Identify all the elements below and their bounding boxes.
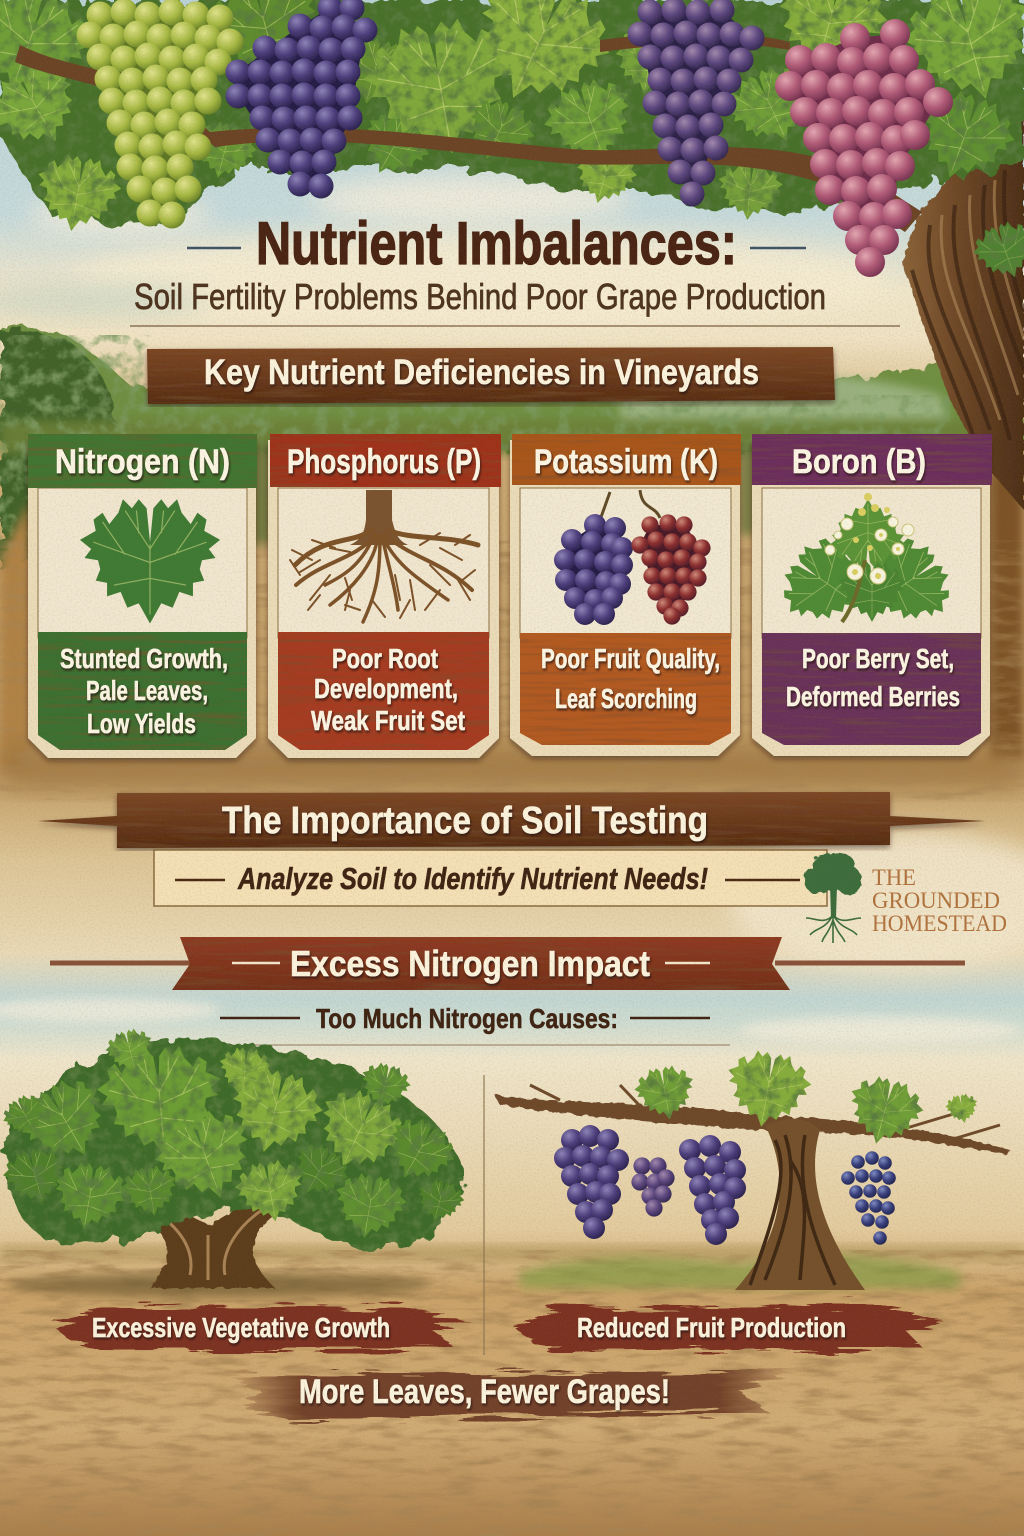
nitrogen symptoms: Low Yields [87, 708, 196, 739]
nitrogen symptoms: Pale Leaves, [86, 675, 208, 706]
subtitle: Soil Fertility Problems Behind Poor Grape Production [134, 276, 826, 317]
boron symptoms: Deformed Berries [786, 681, 960, 712]
potassium symptoms [520, 633, 731, 745]
label: excessive vegetative growth [55, 1305, 472, 1350]
boron symptoms [762, 633, 981, 745]
banner: key nutrient deficiencies: Key Nutrient Deficiencies in Vineyards [204, 353, 759, 392]
potassium header [512, 434, 741, 485]
boron symptoms: Poor Berry Set, [802, 643, 954, 674]
logo tree [804, 853, 862, 943]
icon: grape leaf [80, 499, 220, 624]
callout: analyze soil: Analyze Soil to Identify Nutrient Needs! [237, 861, 708, 896]
ground texture [0, 1250, 1024, 1536]
callout: more leaves, fewer grapes [225, 1370, 800, 1420]
background: distant vineyard, soil and clouds [0, 176, 1024, 1261]
title: Nutrient Imbalances: [256, 210, 737, 277]
banner: importance of soil testing: The Importance of Soil Testing [222, 800, 708, 842]
label: reduced fruit production: Reduced Fruit Production [577, 1312, 846, 1343]
callout: more leaves, fewer grapes: More Leaves, Fewer Grapes! [299, 1373, 670, 1411]
banner: excess nitrogen impact: Excess Nitrogen Impact [290, 943, 650, 984]
nitrogen symptoms [38, 632, 247, 750]
divider [483, 1075, 485, 1355]
icon: purple and red grapes [554, 490, 711, 625]
phosphorus header: Phosphorus (P) [287, 443, 481, 481]
nitrogen header: Nitrogen (N) [55, 443, 230, 481]
small grape clusters [554, 1125, 629, 1239]
panel: boron card [752, 434, 992, 756]
icon: boron flowers and leaves [769, 493, 964, 643]
label: excessive vegetative growth: Excessive Vegetative Growth [92, 1312, 390, 1343]
panel: potassium card [510, 434, 741, 756]
phosphorus header [270, 434, 501, 487]
illustration: lush overgrown vine [0, 1025, 468, 1297]
logo: the grounded homestead: GROUNDED [872, 888, 1000, 913]
panel: phosphorus card [268, 434, 501, 758]
logo: the grounded homestead: HOMESTEAD [872, 911, 1007, 936]
callout: analyze soil [154, 850, 827, 906]
illustration: vine tree trunk at right [902, 120, 1024, 510]
banner: key nutrient deficiencies [147, 347, 835, 404]
phosphorus symptoms: Weak Fruit Set [311, 705, 465, 736]
subheading: too much nitrogen: Too Much Nitrogen Causes: [316, 1003, 618, 1034]
boron header: Boron (B) [792, 443, 926, 481]
phosphorus symptoms: Poor Root [332, 643, 438, 674]
label: reduced fruit production [515, 1305, 945, 1350]
grape cluster: green [76, 0, 244, 228]
potassium header: Potassium (K) [534, 443, 718, 481]
icon: roots [290, 490, 478, 622]
nitrogen header [28, 434, 257, 488]
illustration: sparse vine with few grapes [495, 1046, 1010, 1290]
potassium symptoms: Poor Fruit Quality, [541, 643, 720, 674]
grape cluster: dark purple [226, 0, 378, 198]
potassium symptoms: Leaf Scorching [555, 683, 697, 714]
vine branches [15, 33, 922, 232]
grape cluster: pink red [775, 19, 953, 277]
phosphorus symptoms [278, 632, 489, 750]
illustration: vine canopy with leaves [0, 0, 1024, 288]
logo: the grounded homestead: THE [872, 865, 916, 890]
nitrogen symptoms: Stunted Growth, [60, 643, 228, 674]
banner: importance of soil testing [38, 792, 985, 848]
boron header [752, 434, 992, 485]
logo: the grounded homestead [804, 853, 1007, 943]
panel: nitrogen card [28, 434, 257, 758]
phosphorus symptoms: Development, [314, 673, 458, 704]
grape cluster: purple [628, 0, 764, 206]
banner: excess nitrogen impact [50, 937, 965, 990]
